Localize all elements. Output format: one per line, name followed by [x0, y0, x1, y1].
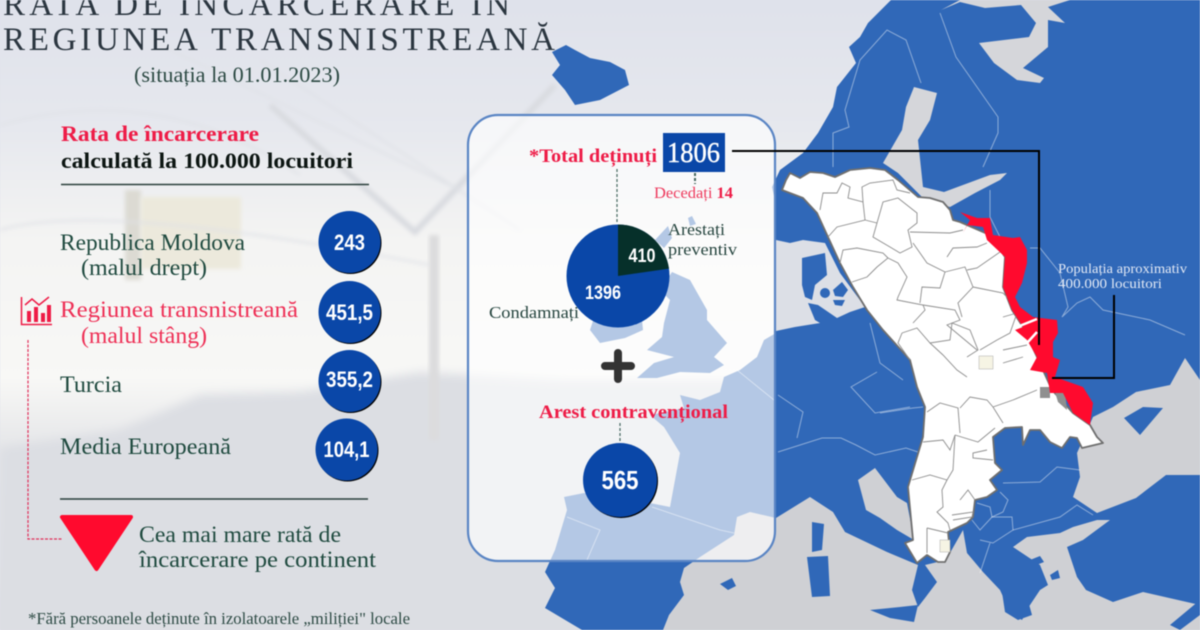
subtitle: (situația la 01.01.2023): [134, 62, 340, 87]
map: northern isles: [655, 216, 696, 248]
total prisoners label: *Total deținuți: [529, 146, 657, 167]
title: REGIUNEA TRANSNISTREANĂ: [3, 21, 555, 58]
row: Republica Moldova: [60, 211, 382, 280]
row: Republica Moldova: Republica Moldova: [60, 230, 245, 255]
administrative arrest value: 565: [602, 465, 638, 495]
heading: incarceration rate: [61, 121, 353, 173]
gray districts: [1040, 387, 1067, 410]
row: Media Europeană: 104,1: [324, 437, 370, 462]
dashed connectors: [617, 169, 695, 443]
row: Turcia: Turcia: [60, 372, 122, 397]
row: Turcia: [60, 350, 382, 413]
callout: highest rate: încarcerare pe continent: [138, 547, 377, 572]
map: country borders: [567, 13, 1185, 573]
map: White Sea: [941, 0, 1070, 83]
map of Europe: [545, 0, 1200, 630]
callout: population: 400.000 locuitori: [1058, 277, 1162, 292]
title: [3, 0, 555, 58]
map: zoomed Moldova: [782, 168, 1103, 563]
deceased label: Decedați 14: [654, 185, 733, 202]
Transnistria region: [960, 212, 1093, 425]
map: North Sea and Baltic: [776, 240, 865, 331]
administrative arrest value: [583, 443, 658, 518]
callout: highest rate: Cea mai mare rată de: [139, 522, 341, 547]
row: Regiunea transnistreană: [60, 281, 382, 348]
Chisinau and Gagauzia patches: [940, 356, 993, 552]
map: Great Britain: [637, 272, 727, 378]
map: Mediterranean Sea: [663, 497, 1200, 630]
pie label: pre-trial: Arestați: [668, 220, 725, 239]
map: Adriatic Sea: [858, 468, 914, 540]
Moldova outline: [782, 168, 1103, 563]
callout: population: Populația aproximativ: [1058, 262, 1187, 277]
panel: total prisoners: [468, 115, 775, 561]
map: islands and peninsulas: [552, 45, 1200, 630]
callout: highest rate: [138, 522, 377, 572]
heading: incarceration rate: Rata de încarcerare: [61, 121, 259, 146]
total prisoners value: 1806: [667, 137, 720, 169]
row: Regiunea transnistreană: (malul stâng): [81, 323, 207, 348]
row: Republica Moldova: (malul drept): [81, 255, 207, 280]
pie chart: [566, 224, 670, 328]
pie chart: 410: [628, 246, 656, 267]
row: Regiunea transnistreană: 451,5: [326, 300, 373, 325]
pie label: pre-trial: preventiv: [668, 240, 738, 259]
pie label: convicted: Condamnați: [489, 303, 579, 322]
map: Black Sea: [1073, 358, 1200, 513]
plus sign: [605, 353, 631, 379]
row: Media Europeană: Media Europeană: [60, 434, 231, 459]
map: Ireland: [590, 300, 643, 343]
row: Turcia: 355,2: [326, 367, 373, 392]
district borders: [820, 180, 1037, 553]
dashed connector to triangle: [28, 340, 63, 539]
pie chart: 1396: [585, 283, 621, 304]
callout lines: [732, 151, 1114, 378]
callout: population: [1058, 262, 1187, 292]
white gaps in Transnistria: [1017, 319, 1037, 343]
map: mainland Europe: [545, 0, 1200, 630]
row: Regiunea transnistreană: Regiunea transnistreană: [60, 297, 298, 322]
map: Gulf of Bothnia and Gulf of Finland: [883, 87, 1007, 207]
row: Media Europeană: [60, 418, 378, 482]
footnote: *Fără persoanele deținute în izolatoarele „miliției" locale: [28, 609, 410, 628]
pie label: pre-trial: [668, 220, 738, 259]
heading: incarceration rate: calculată la 100.000 locuitori: [61, 148, 353, 173]
row: Republica Moldova: 243: [334, 230, 365, 255]
administrative arrest label: Arest contravențional: [539, 402, 728, 423]
icon: red triangle: [62, 517, 131, 569]
icon: rising bar chart: [22, 297, 52, 324]
